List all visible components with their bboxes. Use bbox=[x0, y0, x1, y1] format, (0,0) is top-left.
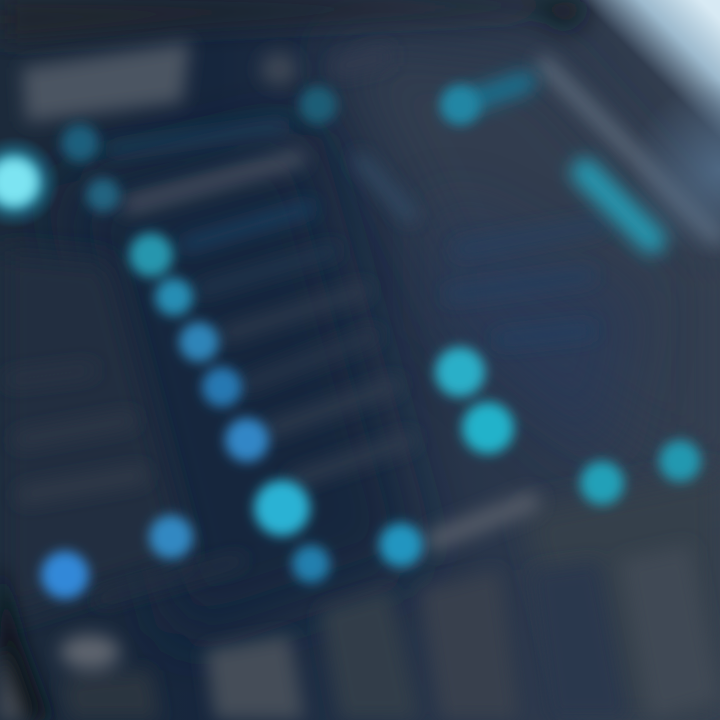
teal highlight strokes bbox=[462, 82, 652, 240]
bright dot glow bbox=[0, 136, 60, 228]
status dots bbox=[0, 85, 701, 599]
bright top-right corner bbox=[540, 0, 720, 260]
left bottom edge bbox=[0, 560, 50, 720]
top dark band bbox=[0, 0, 590, 40]
list row bars bbox=[10, 125, 600, 600]
heading block bbox=[22, 42, 390, 122]
bottom blocks bbox=[60, 545, 720, 720]
